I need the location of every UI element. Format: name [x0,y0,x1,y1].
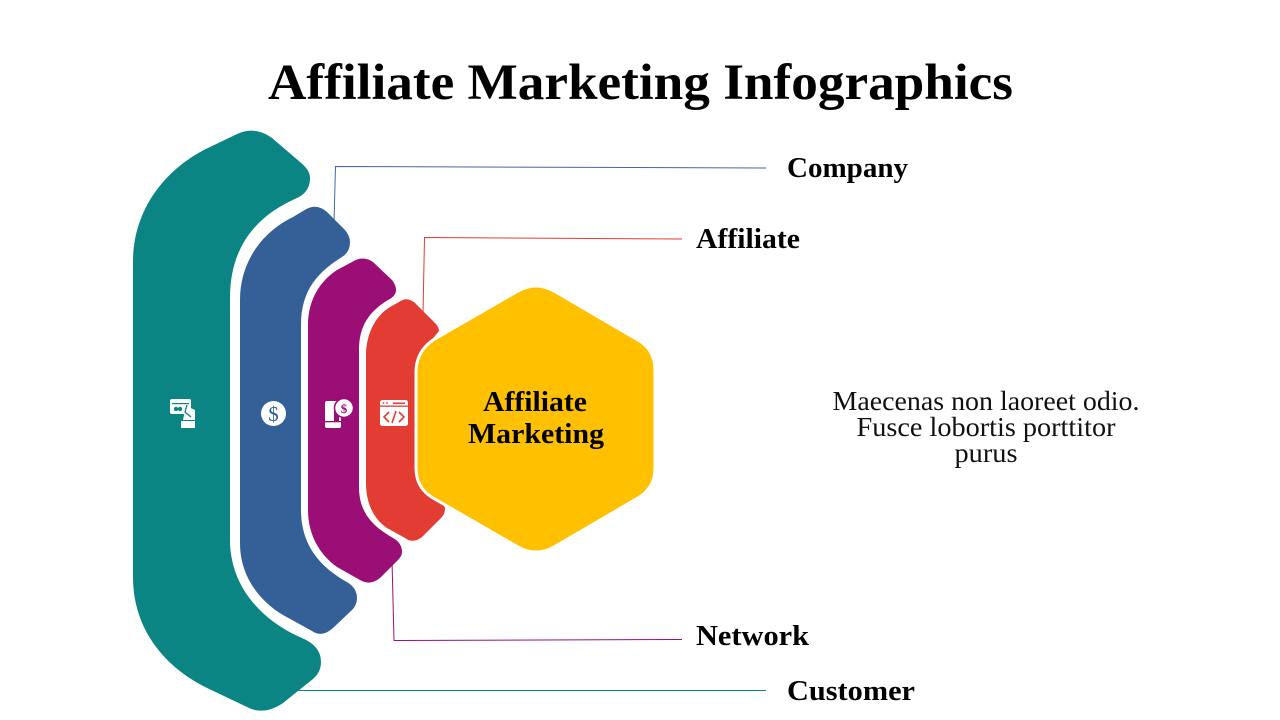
icon: dollar coin: $ [268,402,279,426]
connector: company [334,166,766,222]
icon: card and hand [170,399,195,428]
icon: phone with dollar bubble: $ [341,401,348,416]
title: Affiliate Marketing Infographics [268,55,1013,111]
band: company blue [240,207,357,634]
body text: Maecenas non laoreet odio. [832,386,1140,416]
body text: Fusce lobortis porttitor [856,412,1116,442]
hexagon: affiliate marketing [416,286,655,552]
band: network purple [308,258,402,583]
connector: customer [298,690,766,692]
icon: phone with dollar bubble [325,398,354,428]
icon: dollar coin [261,401,286,426]
label: customer: Customer [787,675,915,707]
label: network: Network [696,620,810,652]
hexagon label: Marketing [468,418,605,450]
hexagon label: Affiliate [483,386,587,418]
connector: network [392,560,682,640]
body text: purus [954,438,1018,468]
label: company: Company [787,152,908,184]
band: affiliate red [366,299,445,541]
connector: affiliate [423,238,682,314]
icon: code window [380,400,408,426]
band: customer teal [133,131,321,711]
label: affiliate: Affiliate [696,223,800,255]
